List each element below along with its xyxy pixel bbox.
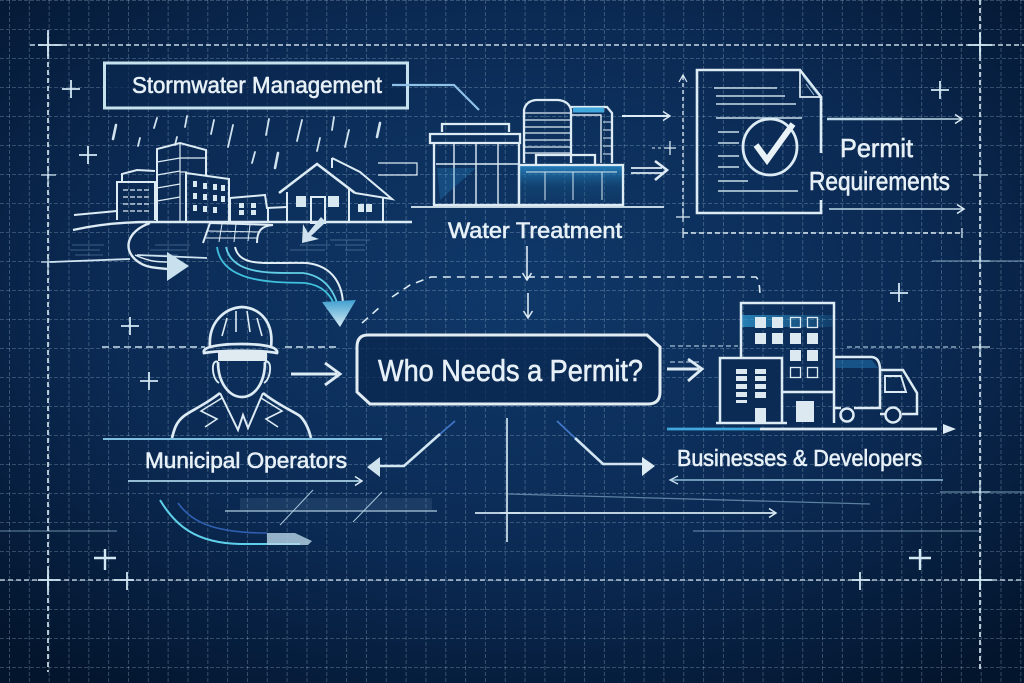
- ground arrow under businesses: [667, 424, 956, 434]
- icon: water treatment plant: [411, 100, 664, 207]
- label: Permit Requirements: Permit: [840, 133, 914, 163]
- label: Businesses & Developers: [670, 445, 943, 484]
- central vertical line and cross: [475, 418, 520, 542]
- connector: title to water treatment: [392, 85, 479, 110]
- frame cross marks and plus signs: [38, 33, 992, 590]
- icon: permit document: [697, 70, 821, 213]
- central box: Who Needs a Permit?: Who Needs a Permit?: [378, 353, 643, 388]
- runoff arrow left: [50, 223, 207, 281]
- icon: city and house: [73, 143, 417, 243]
- permit requirement lines: [827, 119, 964, 209]
- icon: rain: [113, 116, 380, 168]
- title box: Stormwater Management: Stormwater Management: [132, 72, 382, 98]
- arrow: operator to centre: [291, 363, 340, 385]
- line under operator: [103, 438, 382, 440]
- label: Permit Requirements: Requirements: [809, 166, 950, 196]
- icon: businesses building and truck: [716, 303, 917, 423]
- title box: Stormwater Management: [104, 63, 408, 108]
- label: Municipal Operators: Municipal Operators: [145, 448, 347, 473]
- short dashes by centre box: [670, 346, 960, 362]
- lower sketch lines and swoosh: [0, 261, 1024, 545]
- icon: down-left runoff arrow: [302, 217, 326, 243]
- label: Businesses & Developers: Businesses & Developers: [677, 445, 922, 471]
- water flow arrows: [217, 247, 356, 327]
- arrows: plant to permit: [622, 75, 962, 238]
- arrows: treatment to centre: [362, 246, 760, 323]
- building windows: [193, 181, 372, 215]
- arrows from centre to lower labels: [367, 421, 655, 477]
- label: Permit Requirements: [809, 133, 950, 196]
- icon: municipal operator: [172, 307, 311, 438]
- central box: Who Needs a Permit?: [357, 335, 660, 404]
- dashed line through operator: [102, 346, 340, 348]
- arrow: centre to businesses: [667, 359, 702, 381]
- label: Water Treatment: Water Treatment: [448, 218, 622, 243]
- hatched ground: [70, 240, 370, 255]
